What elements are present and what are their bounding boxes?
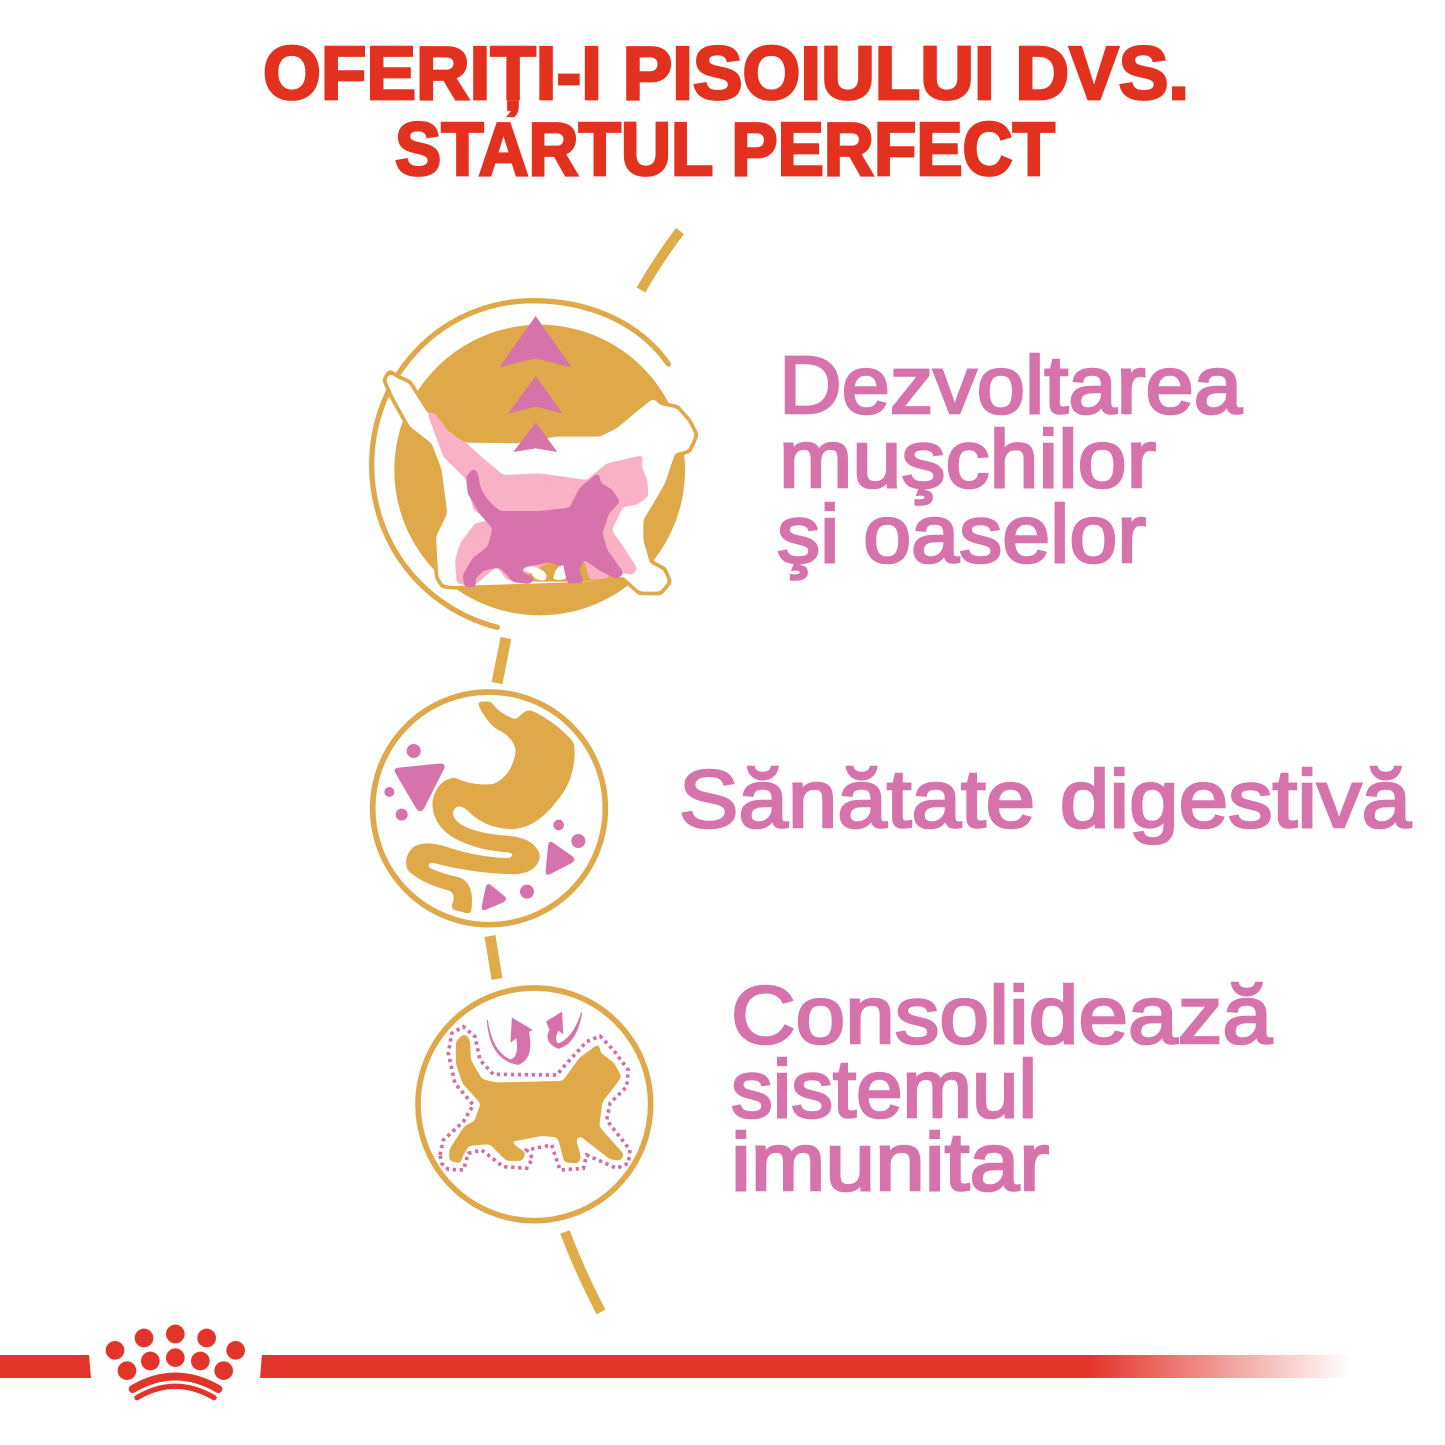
white band between arc and tail (388, 380, 418, 408)
icon: muscle and bone development, growing cat (372, 301, 695, 627)
gold disc (394, 325, 685, 615)
timeline connector: segment three (490, 936, 497, 979)
icon: immune system (418, 988, 651, 1221)
text: strengthens immune system: sistemul (731, 1044, 1037, 1135)
timeline connector: top segment (641, 231, 680, 290)
text: muscle and bone development: Dezvoltarea (779, 340, 1242, 431)
adult cat white silhouette (386, 373, 695, 592)
pink triangles (394, 764, 575, 911)
adult cat gold outline (386, 373, 695, 592)
icon: digestive health (373, 692, 605, 925)
crown dots (106, 1325, 245, 1380)
footer bar left (0, 1355, 91, 1378)
ground between legs (500, 562, 623, 582)
timeline connector: segment two (497, 638, 506, 683)
ring (373, 692, 605, 925)
logo: royal crown (106, 1325, 245, 1398)
text: strengthens immune system (731, 970, 1272, 1208)
stomach and intestine (407, 702, 574, 913)
ring (418, 988, 651, 1221)
kitten (450, 1035, 623, 1163)
text: strengthens immune system: imunitar (731, 1117, 1049, 1208)
text: muscle and bone development (777, 340, 1242, 580)
title: STARTUL PERFECT (395, 107, 1055, 191)
text: muscle and bone development: muşchilor (779, 414, 1156, 505)
title: OFERIȚI-I PISOIULUI DVS. (263, 31, 1189, 116)
timeline connector: bottom segment (565, 1232, 601, 1312)
outer arc (372, 301, 668, 627)
title (263, 31, 1189, 191)
text: digestive health: Sănătate digestivă (679, 754, 1411, 845)
young cat silhouette (427, 412, 648, 587)
crown bands (133, 1376, 218, 1389)
footer bar right with fade (260, 1355, 1350, 1378)
dotted protective outline (440, 1027, 630, 1170)
text: strengthens immune system: Consolidează (731, 970, 1272, 1061)
gaps between kitten legs (523, 565, 566, 580)
upward arrows (499, 316, 572, 452)
pink dots (384, 744, 585, 899)
pink arrows (487, 1012, 582, 1064)
kitten silhouette (463, 469, 623, 587)
text: muscle and bone development: şi oaselor (777, 489, 1146, 580)
